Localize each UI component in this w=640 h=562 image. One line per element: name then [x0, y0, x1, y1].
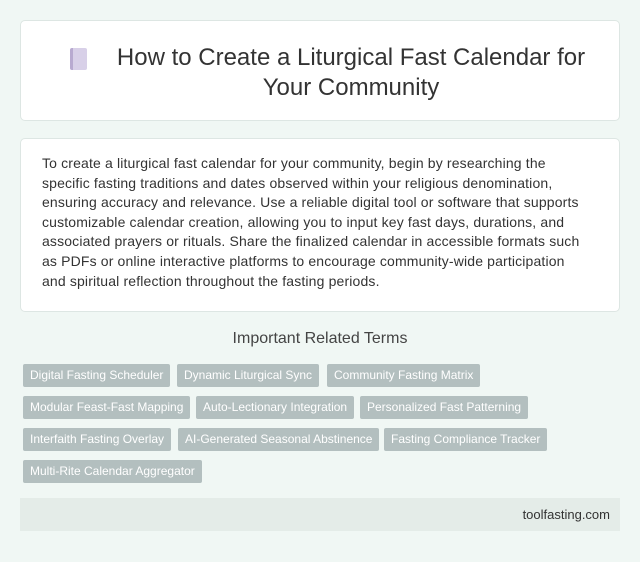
tags: AI-Generated Seasonal Abstinence — [185, 432, 372, 446]
tags: Dynamic Liturgical Sync — [184, 368, 312, 382]
heading: related terms: Important Related Terms — [233, 330, 407, 347]
tags: Digital Fasting Scheduler — [30, 368, 163, 382]
footer text: toolfasting.com — [523, 507, 610, 522]
body text card — [20, 138, 620, 312]
tags: Interfaith Fasting Overlay — [30, 432, 164, 446]
tags: Community Fasting Matrix — [334, 368, 473, 382]
title card — [20, 20, 620, 121]
tags: Modular Feast-Fast Mapping — [30, 400, 183, 414]
tags: Personalized Fast Patterning — [367, 400, 521, 414]
paragraph: To create a liturgical fast calendar for your community, begin by researching the specific fasting traditions and dates observed within your religious denomination, ensuring accuracy and relevance. Use a reliable digital tool or software that supports customizable calendar creation, allowing you to input key fast days, durations, and associated prayers or rituals. Share the finalized calendar in accessible formats such as PDFs or online interactive platforms to encourage community-wide participation and spiritual reflection throughout the fasting periods. — [42, 155, 579, 289]
tags: Fasting Compliance Tracker — [391, 432, 540, 446]
icon: scroll — [70, 48, 87, 70]
title: How to Create a Liturgical Fast Calendar for Your Community — [117, 44, 585, 101]
footer — [20, 498, 620, 531]
tags: Auto-Lectionary Integration — [203, 400, 347, 414]
tags: Multi-Rite Calendar Aggregator — [30, 464, 195, 478]
